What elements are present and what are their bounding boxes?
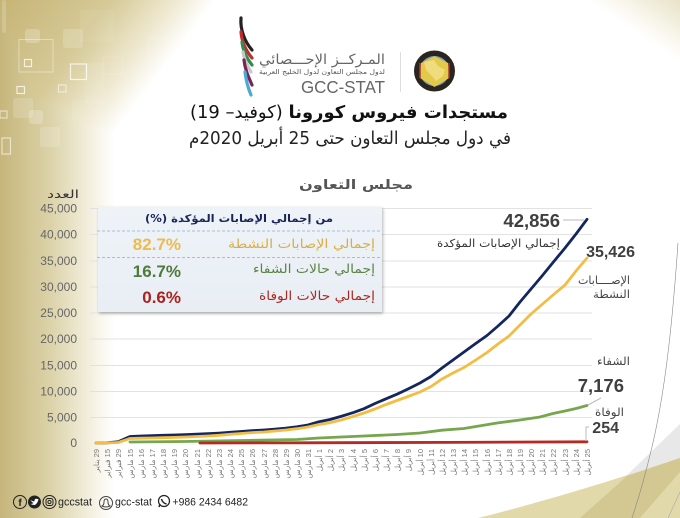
x axis date labels: أبريل‎ 11 (426, 449, 436, 475)
x axis date labels: أبريل‎ 5 (359, 449, 369, 471)
y axis labels (40, 202, 77, 450)
series: deaths (200, 442, 587, 443)
x axis date labels: أبريل‎ 12 (437, 449, 447, 476)
callout panel: share of confirmed cases: 82.7% (133, 235, 181, 254)
x axis date labels: مارس‎ 26 (248, 449, 257, 479)
callout: active cases: 35,426 (586, 244, 635, 261)
x axis date labels: أبريل‎ 4 (348, 449, 358, 471)
y axis labels: 45,000 (40, 202, 77, 216)
line chart: four series (96, 219, 587, 443)
callout: total confirmed: 42,856 (503, 210, 560, 231)
icon: facebook (14, 496, 26, 509)
x axis date labels: فبراير‎ 29 (114, 449, 123, 479)
y axis labels: 30,000 (40, 280, 77, 294)
callout: recovered: 7,176 (578, 375, 624, 396)
x axis date labels: أبريل‎ 9 (403, 449, 413, 471)
callout: total confirmed (437, 210, 584, 250)
x axis date labels: أبريل‎ 15 (470, 449, 480, 476)
row: deaths: إجمالي حالات الوفاة (259, 288, 375, 304)
logo: organisation name (259, 52, 385, 97)
x axis date labels: مارس‎ 30 (293, 449, 302, 479)
y axis labels: 20,000 (40, 332, 77, 346)
x axis date labels: أبريل‎ 14 (459, 449, 469, 476)
x axis date labels: مارس‎ 20 (181, 449, 190, 479)
x axis date labels: أبريل‎ 13 (448, 449, 458, 476)
x axis date labels: مارس‎ 18 (159, 449, 168, 479)
chart grid lines (90, 208, 592, 418)
row: active: إجمالي الإصابات النشطة (228, 236, 375, 251)
callout: deaths (586, 405, 624, 441)
x axis date labels: مارس‎ 17 (148, 449, 157, 479)
y axis labels: 5,000 (47, 410, 77, 424)
x axis date labels: مارس‎ 28 (271, 449, 280, 479)
x axis date labels: مارس‎ 27 (260, 449, 269, 479)
y axis labels: 35,000 (40, 254, 77, 268)
y axis labels: 10,000 (40, 384, 77, 398)
x axis date labels: مارس‎ 22 (204, 449, 213, 479)
x axis date labels: أبريل‎ 20 (526, 449, 536, 476)
logo: organisation name: المـركــز الإحـــصائي (259, 52, 385, 68)
phone number: +986 2434 6482 (172, 496, 248, 508)
callout: recovered (578, 354, 630, 405)
x axis date labels: مارس‎ 15 (126, 449, 135, 479)
x axis date labels: مارس‎ 25 (237, 449, 246, 479)
x axis date labels: فبراير‎ 15 (103, 449, 112, 479)
chart heading: مجلس التعاون (299, 178, 413, 193)
row: recovered: إجمالي حالات الشفاء (253, 261, 375, 276)
x axis date labels: مارس‎ 16 (137, 449, 146, 479)
callout: active cases: الإصــــابات (578, 274, 630, 287)
y axis labels: 15,000 (40, 358, 77, 372)
x axis date labels: أبريل‎ 19 (515, 449, 525, 476)
y axis labels: 40,000 (40, 228, 77, 242)
callout: deaths: 254 (592, 420, 619, 437)
footer: social media contacts (14, 496, 248, 510)
x axis date labels: أبريل‎ 17 (493, 449, 503, 476)
callout: recovered: الشفاء (597, 354, 630, 368)
x axis date labels: أبريل‎ 6 (370, 449, 380, 471)
icon: snapchat (100, 496, 112, 510)
logo: organisation name: GCC-STAT (301, 77, 385, 97)
callout: active cases: النشطة (593, 288, 630, 301)
callout panel: share of confirmed cases: 0.6% (142, 288, 181, 307)
icon: whatsapp (158, 496, 170, 507)
x axis date labels: مارس‎ 24 (226, 449, 235, 479)
icon: instagram (43, 496, 56, 508)
main title: في دول مجلس التعاون حتى 25 أبريل 2020م (189, 126, 511, 149)
x axis date labels: أبريل‎ 2 (325, 449, 335, 471)
x axis date labels: أبريل‎ 10 (415, 449, 425, 476)
main title (189, 103, 511, 149)
x axis date labels (92, 449, 592, 479)
series: active cases (96, 258, 587, 443)
series: recovered (130, 406, 587, 442)
x axis date labels: أبريل‎ 18 (504, 449, 514, 476)
callout: total confirmed: إجمالي الإصابات المؤكدة (437, 237, 560, 250)
x axis date labels: أبريل‎ 25 (582, 449, 592, 476)
x axis date labels: أبريل‎ 7 (381, 449, 391, 471)
icon: twitter (28, 496, 41, 508)
y axis title: العدد (47, 187, 79, 201)
handle: gccstat: gccstat (58, 496, 92, 508)
logo: organisation name: لدول مجلس التعاون لدول الخليج العربية (259, 68, 385, 76)
panel heading: من إجمالي الإصابات المؤكدة (%) (145, 213, 333, 225)
x axis date labels: مارس‎ 21 (193, 449, 202, 479)
handle: gcc-stat: gcc-stat (115, 496, 152, 508)
background: bottom-right swoosh (478, 243, 680, 518)
logo: GCC-STAT ribbon (241, 18, 252, 95)
x axis date labels: مارس‎ 29 (282, 449, 291, 479)
logo: GCC emblem (414, 50, 455, 92)
x axis date labels: مارس‎ 19 (170, 449, 179, 479)
x axis date labels: أبريل‎ 24 (571, 449, 581, 476)
x axis date labels: أبريل‎ 22 (548, 449, 558, 476)
callout panel: share of confirmed cases: 16.7% (133, 262, 181, 281)
x axis date labels: أبريل‎ 3 (336, 449, 346, 471)
decorative squares (0, 0, 168, 154)
series: total confirmed (96, 219, 587, 443)
x axis date labels: مارس‎ 23 (215, 449, 224, 479)
x axis date labels: أبريل‎ 16 (482, 449, 492, 476)
callout: active cases (578, 244, 635, 301)
x axis date labels: أبريل‎ 1 (314, 449, 324, 471)
y axis labels: 25,000 (40, 306, 77, 320)
x axis date labels: أبريل‎ 8 (392, 449, 402, 471)
callout: deaths: الوفاة (595, 405, 624, 420)
icon: facebook: f (18, 498, 22, 509)
callout panel: share of confirmed cases (97, 207, 382, 312)
main title: مستجدات فيروس كورونا (كوفيد– 19) (190, 103, 508, 123)
x axis date labels: أبريل‎ 21 (537, 449, 547, 476)
x axis date labels: مارس‎ 31 (304, 449, 313, 479)
y axis labels: 0 (70, 436, 77, 450)
x axis date labels: يناير‎ 29 (92, 449, 101, 473)
x axis date labels: أبريل‎ 23 (560, 449, 570, 476)
